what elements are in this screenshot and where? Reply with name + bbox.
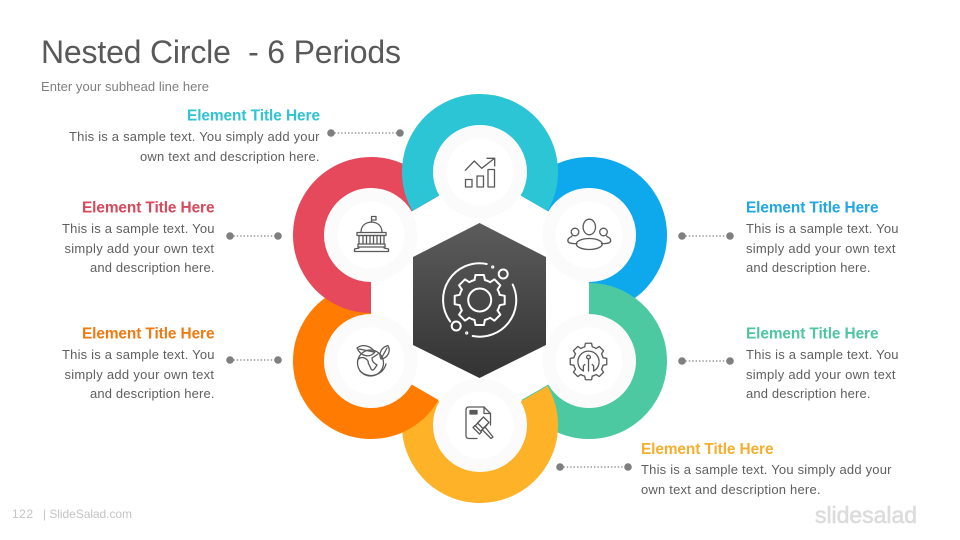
connector: red [226, 232, 282, 240]
ring: teal [418, 110, 542, 203]
item: red text: and description here. [90, 260, 214, 275]
ring: green [535, 298, 651, 424]
item: red text: Element Title Here [82, 200, 215, 217]
item: teal text [69, 108, 320, 164]
item: red text [62, 200, 215, 275]
center hexagon [413, 223, 546, 378]
subhead: Enter your subhead line here [41, 79, 209, 94]
item: orange text: This is a sample text. You [62, 347, 214, 362]
item: green text: Element Title Here [746, 326, 879, 343]
connector: orange [226, 356, 282, 364]
footer: page number: | SlideSalad.com [43, 507, 132, 521]
icon: growth chart [465, 158, 495, 187]
ring: blue [535, 172, 651, 298]
connector: blue [678, 232, 734, 240]
icon discs [324, 126, 636, 472]
item: orange text: simply add your own text [64, 367, 214, 382]
item: blue text: simply add your own text [746, 241, 896, 256]
icon: capitol building [354, 216, 388, 252]
item: orange text: Element Title Here [82, 326, 215, 343]
item: yellow text: own text and description here. [641, 482, 820, 497]
item: yellow text [641, 441, 892, 497]
icon: gavel document [466, 407, 493, 438]
footer: page number: 122 [12, 507, 33, 521]
ring: yellow [418, 394, 542, 487]
icon: gear circuit [570, 343, 607, 380]
item: yellow text: This is a sample text. You simply add your [641, 462, 892, 477]
item: green text [746, 326, 898, 401]
item: green text: simply add your own text [746, 367, 896, 382]
icon: earth with leaves [357, 346, 389, 376]
item: blue text: Element Title Here [746, 200, 879, 217]
item: blue text: This is a sample text. You [746, 221, 898, 236]
connector: green [678, 357, 734, 365]
footer: logo: slidesalad [815, 502, 917, 528]
item: blue text [746, 200, 898, 275]
item: green text: and description here. [746, 386, 870, 401]
item: red text: This is a sample text. You [62, 221, 214, 236]
ring: orange [309, 298, 425, 424]
item: red text: simply add your own text [64, 241, 214, 256]
item: teal text: own text and description here. [140, 149, 320, 164]
item: orange text: and description here. [90, 386, 214, 401]
item: teal text: This is a sample text. You simply add your [69, 129, 320, 144]
icon: people group [568, 219, 611, 250]
icon: central gear with orbit [443, 263, 516, 337]
item: blue text: and description here. [746, 260, 870, 275]
connector: yellow [556, 463, 632, 471]
item: yellow text: Element Title Here [641, 441, 774, 458]
ring: red [309, 172, 425, 298]
item: teal text: Element Title Here [187, 108, 320, 124]
title: Nested Circle - 6 Periods [41, 34, 401, 70]
item: orange text [62, 326, 215, 401]
connector: teal [327, 129, 404, 137]
nested circle diagram [309, 110, 651, 487]
item: green text: This is a sample text. You [746, 347, 898, 362]
